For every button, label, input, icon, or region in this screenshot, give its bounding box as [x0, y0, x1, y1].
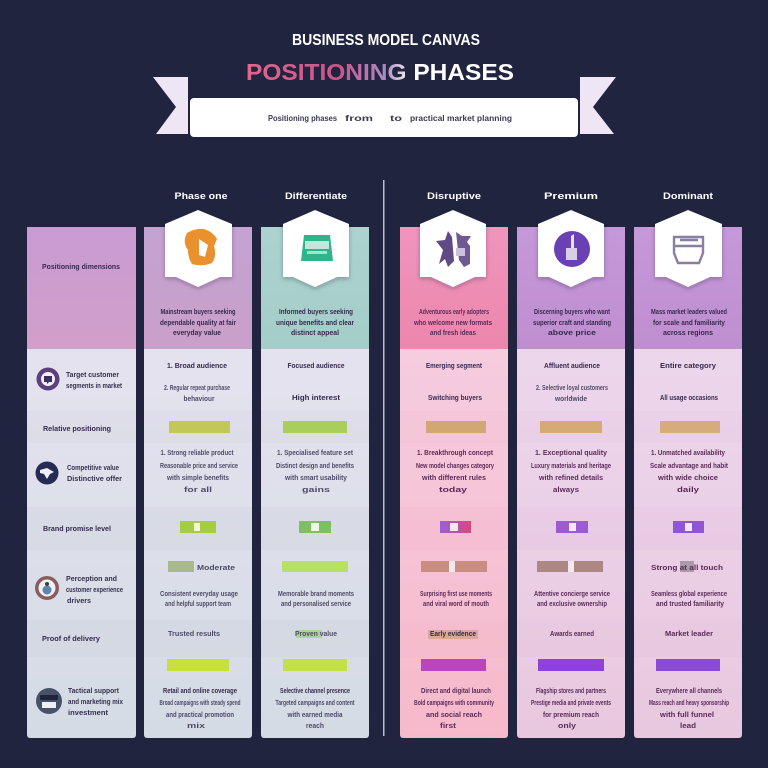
- header text: everyday value: [173, 330, 221, 337]
- ribbon left tail: [153, 77, 188, 134]
- banner text: Positioning phases: [268, 114, 338, 123]
- badge: [655, 210, 722, 287]
- row 6 text: Trusted results: [168, 631, 220, 638]
- icon: outlined shield: [674, 237, 703, 263]
- row 5 bar: [537, 561, 603, 572]
- row 2 bar: [426, 421, 486, 433]
- row 7 text: [531, 688, 611, 730]
- icon: green case: [301, 235, 333, 261]
- panel: column 4: [517, 191, 625, 738]
- row 5 text: [420, 591, 492, 608]
- column heading: Disruptive: [427, 191, 481, 201]
- row 1 text: worldwide: [554, 396, 587, 403]
- row 4 badge: [299, 521, 331, 533]
- row 5 text: and helpful support team: [165, 601, 231, 608]
- title: [246, 32, 514, 85]
- column heading: Differentiate: [285, 191, 347, 201]
- title line two: POSITIONING PHASES: [246, 59, 514, 85]
- ribbon right tail: [580, 77, 616, 134]
- banner plate: [190, 98, 578, 137]
- row 7 text: and social reach: [426, 712, 482, 719]
- row 7 text: Bold campaigns with community: [414, 700, 494, 707]
- header label: Positioning dimensions: [42, 264, 120, 271]
- header text: [413, 309, 492, 337]
- column heading: Phase one: [174, 191, 228, 201]
- row 1 text: Focused audience: [288, 363, 345, 370]
- row 7 bar: [283, 659, 347, 671]
- icon: purple seal: [554, 231, 590, 267]
- row 3 text: always: [553, 487, 579, 494]
- icon: jagged figures: [436, 231, 471, 267]
- row 5 value: [651, 561, 723, 572]
- row 3 text: New model changes category: [416, 463, 494, 470]
- row 5 text: Seamless global experience: [651, 591, 727, 598]
- row 7 text: [649, 688, 729, 730]
- row 3 text: 1. Breakthrough concept: [417, 450, 494, 457]
- row 7 bar: [421, 659, 486, 671]
- row 1 text: All usage occasions: [660, 395, 718, 402]
- row 7 text: Everywhere all channels: [656, 688, 722, 695]
- row 1 text: Emerging segment: [426, 363, 483, 370]
- row 7 text: and practical promotion: [166, 712, 234, 719]
- row 5 text: [534, 591, 610, 608]
- row 3 text: with wide choice: [657, 475, 718, 482]
- row 5 value: Strong at all touch: [651, 565, 723, 572]
- row 3 text: for all: [184, 487, 212, 494]
- header text: superior craft and standing: [533, 320, 611, 327]
- row 4 label: Brand promise level: [43, 526, 111, 533]
- row 7 text: with earned media: [287, 712, 343, 719]
- row 6 text: Market leader: [665, 631, 713, 638]
- header text: Mass market leaders valued: [651, 309, 727, 316]
- banner text: to: [390, 114, 402, 123]
- icon: row 7: [36, 688, 62, 714]
- row 5 text: [160, 591, 238, 608]
- row 5 text: Consistent everyday usage: [160, 591, 238, 598]
- header text: Discerning buyers who want: [534, 309, 611, 316]
- row 7 text: Mass reach and heavy sponsorship: [649, 700, 729, 707]
- row 1 label: segments in market: [66, 383, 123, 390]
- row 7 text: mix: [187, 723, 205, 730]
- panel: column 3: [400, 191, 508, 738]
- row 5 value: [168, 561, 235, 572]
- row 6 text: Early evidence: [430, 631, 476, 638]
- row 4 badge: [556, 521, 588, 533]
- panel: column 1: [144, 191, 252, 738]
- header text: above price: [548, 330, 596, 337]
- icon: orange block: [185, 229, 217, 265]
- row 3 text: gains: [302, 487, 330, 494]
- badge: [420, 210, 486, 287]
- row 3 text: Reasonable price and service: [160, 463, 238, 470]
- row 5 text: Memorable brand moments: [278, 591, 354, 598]
- row 7 text: only: [558, 723, 576, 730]
- row 1 text: [164, 363, 230, 403]
- header text: [160, 309, 236, 337]
- icon: row 1: [36, 368, 60, 390]
- row 1 label: [66, 372, 123, 390]
- row 3 text: [416, 450, 494, 494]
- row 1 text: Entire category: [660, 363, 716, 370]
- row 2 bar: [283, 421, 347, 433]
- row 5 text: and personalised service: [281, 601, 351, 608]
- row 7 text: lead: [680, 723, 696, 730]
- row 7 label: Tactical support: [68, 688, 120, 695]
- badge: [538, 210, 604, 287]
- row 2 label: Relative positioning: [43, 426, 111, 433]
- row 5 value: Moderate: [197, 565, 235, 572]
- row 7 label: [68, 688, 123, 717]
- centre divider: [383, 180, 384, 736]
- title line one: BUSINESS MODEL CANVAS: [292, 32, 480, 49]
- header text: [651, 309, 727, 337]
- row 3 text: [650, 450, 729, 494]
- row 3 text: with simple benefits: [166, 475, 229, 482]
- column heading: Dominant: [663, 191, 713, 201]
- row 5 text: and trusted familiarity: [656, 601, 724, 608]
- row 3 text: 1. Unmatched availability: [651, 450, 725, 457]
- row 7 text: [276, 688, 355, 730]
- row 3 text: [276, 450, 354, 494]
- row 7 label: and marketing mix: [68, 699, 123, 706]
- row 6 text: Awards earned: [550, 631, 594, 638]
- badge: [283, 210, 349, 287]
- header text: Mainstream buyers seeking: [160, 309, 236, 316]
- row 1 text: 2. Regular repeat purchase: [164, 385, 230, 392]
- row 5 label: Perception and: [66, 576, 117, 583]
- header text: Informed buyers seeking: [279, 309, 353, 316]
- row 3 text: Distinct design and benefits: [276, 463, 354, 470]
- row 6 label: Proof of delivery: [42, 636, 100, 643]
- panel: column 5: [634, 191, 742, 738]
- row 3 text: Luxury materials and heritage: [531, 463, 611, 470]
- row 5 label: drivers: [67, 598, 91, 605]
- row 7 text: Prestige media and private events: [531, 700, 611, 707]
- row 3 text: [160, 450, 238, 494]
- banner text: [268, 114, 512, 123]
- row 3 text: Scale advantage and habit: [650, 463, 729, 470]
- row 7 text: Broad campaigns with steady spend: [160, 700, 240, 707]
- row 1 text: 2. Selective loyal customers: [536, 385, 608, 392]
- row 2 bar: [540, 421, 602, 433]
- row 3 text: 1. Specialised feature set: [277, 450, 354, 457]
- header text: for scale and familiarity: [653, 320, 725, 327]
- row 5 bar: [282, 561, 348, 572]
- row 7 text: Flagship stores and partners: [536, 688, 606, 695]
- row 3 label: Competitive value: [67, 465, 119, 472]
- row 1 text: [426, 363, 483, 402]
- row 3 text: today: [439, 487, 467, 494]
- row 2 bar: [660, 421, 720, 433]
- header text: [533, 309, 611, 337]
- row 1 label: Target customer: [66, 372, 119, 379]
- row 5 text: [278, 591, 354, 608]
- row 5 text: [651, 591, 727, 608]
- row 1 text: [660, 363, 718, 402]
- header text: dependable quality at fair: [160, 320, 236, 327]
- row 4 badge: [673, 521, 704, 533]
- row 7 text: Direct and digital launch: [421, 688, 491, 695]
- badge: [165, 210, 232, 287]
- row 5 label: customer experience: [66, 587, 123, 594]
- row 7 text: Targeted campaigns and content: [276, 700, 355, 707]
- banner text: practical market planning: [410, 114, 512, 123]
- row 5 text: and viral word of mouth: [423, 601, 489, 608]
- icon: row 3: [36, 462, 58, 484]
- header text: [276, 309, 354, 337]
- row 7 text: for premium reach: [543, 712, 599, 719]
- header text: unique benefits and clear: [276, 320, 354, 327]
- row 5 bar: [421, 561, 487, 572]
- header text: across regions: [663, 330, 713, 337]
- row 7 text: Retail and online coverage: [163, 688, 237, 695]
- row 4 badge: [180, 521, 216, 533]
- row 3 label: [67, 465, 122, 483]
- row 3 text: daily: [677, 487, 699, 494]
- row 7 bar: [538, 659, 604, 671]
- row 4 badge: [440, 521, 471, 533]
- row 1 text: [536, 363, 608, 403]
- row 3 text: [531, 450, 611, 494]
- ribbon banner: [153, 77, 616, 137]
- row 1 text: Switching buyers: [428, 395, 482, 402]
- header text: and fresh ideas: [430, 330, 476, 337]
- banner text: from: [345, 114, 373, 123]
- row 7 bar: [656, 659, 720, 671]
- row 7 text: Selective channel presence: [280, 688, 350, 695]
- row 2 bar: [169, 421, 230, 433]
- row 5 text: Attentive concierge service: [534, 591, 610, 598]
- row 3 text: 1. Strong reliable product: [160, 450, 234, 457]
- row 3 text: with smart usability: [284, 475, 347, 482]
- row 7 text: [160, 688, 240, 730]
- row 7 text: with full funnel: [659, 712, 714, 719]
- header text: who welcome new formats: [413, 320, 492, 327]
- header text: distinct appeal: [291, 330, 339, 337]
- row 7 text: first: [440, 723, 457, 730]
- row 3 text: with refined details: [538, 475, 603, 482]
- row 1 text: High interest: [292, 395, 341, 402]
- panel: column 2: [261, 191, 369, 738]
- panel: row labels: [27, 227, 136, 738]
- row 7 text: reach: [306, 723, 324, 730]
- row 3 text: with different rules: [421, 475, 486, 482]
- row 1 text: 1. Broad audience: [167, 363, 227, 370]
- row 1 text: Affluent audience: [544, 363, 600, 370]
- column heading: Premium: [544, 191, 598, 201]
- icon: row 5: [35, 576, 59, 600]
- row 1 text: behaviour: [184, 396, 215, 403]
- row 3 label: Distinctive offer: [67, 476, 122, 483]
- header text: Adventurous early adopters: [419, 309, 489, 316]
- row 5 text: and exclusive ownership: [537, 601, 607, 608]
- row 7 label: investment: [68, 710, 109, 717]
- row 1 text: [288, 363, 345, 402]
- row 7 text: [414, 688, 494, 730]
- row 6 text: Proven value: [295, 631, 337, 638]
- row 3 text: 1. Exceptional quality: [535, 450, 607, 457]
- row 5 text: Surprising first use moments: [420, 591, 492, 598]
- row 5 label: [66, 576, 123, 605]
- row 7 bar: [167, 659, 229, 671]
